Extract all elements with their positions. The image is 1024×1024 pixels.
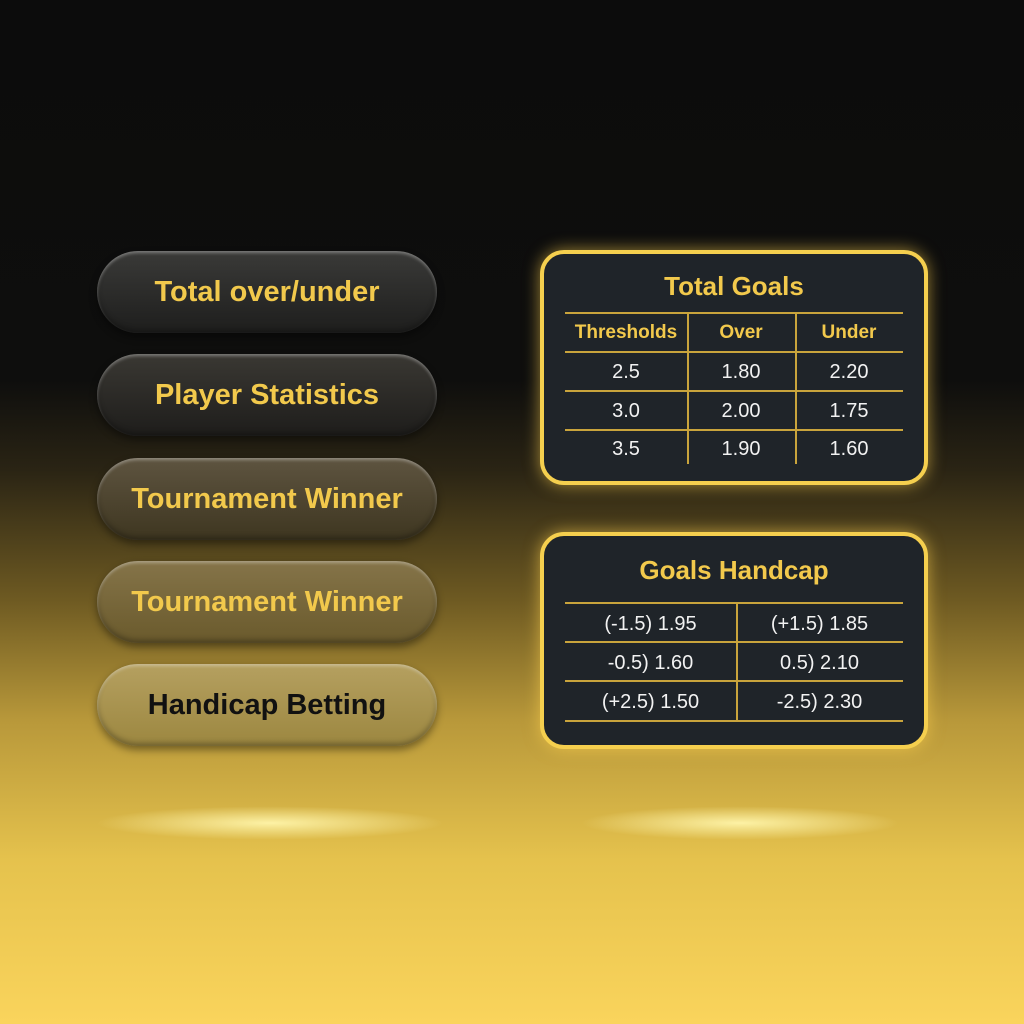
table: thresholds: 1.90 <box>722 438 760 460</box>
table: thresholds: 1.80 <box>722 361 760 383</box>
pill: Tournament Winner: Tournament Winner <box>131 482 403 514</box>
table: thresholds <box>565 312 903 464</box>
table: thresholds: 1.60 <box>830 438 868 460</box>
pill: Player Statistics <box>97 354 437 436</box>
table: handicap: (+1.5) 1.85 <box>771 613 868 635</box>
table: thresholds: Thresholds <box>575 322 677 343</box>
table: handicap: (-1.5) 1.95 <box>604 613 697 635</box>
table: handicap: 0.5) 2.10 <box>780 652 859 674</box>
table: thresholds: Under <box>822 322 876 343</box>
table: thresholds: 2.00 <box>722 400 760 422</box>
panel: Goals Handcap <box>540 532 928 749</box>
table: handicap: -2.5) 2.30 <box>777 691 862 713</box>
title: Goals Handcap: Goals Handcap <box>639 555 829 585</box>
pill: Handicap Betting <box>97 664 437 746</box>
table: thresholds: 1.75 <box>830 400 868 422</box>
table: handicap: (+2.5) 1.50 <box>602 691 699 713</box>
table: thresholds: 3.5 <box>612 438 640 460</box>
pill: Tournament Winner 2 <box>97 561 437 643</box>
table: thresholds: Over <box>719 322 763 343</box>
glow: right <box>580 806 900 840</box>
pill: Handicap Betting: Handicap Betting <box>148 688 386 720</box>
pill: Player Statistics: Player Statistics <box>155 378 379 410</box>
pill: Total over/under: Total over/under <box>154 276 380 308</box>
table: thresholds: 2.5 <box>612 361 640 383</box>
table: handicap <box>565 602 903 722</box>
glow: left <box>95 806 445 840</box>
panel: Total Goals <box>540 250 928 485</box>
pill: Total over/under <box>97 251 437 333</box>
table: handicap: -0.5) 1.60 <box>608 652 693 674</box>
table: thresholds: 2.20 <box>830 361 868 383</box>
table: thresholds: 3.0 <box>612 400 640 422</box>
pill: Tournament Winner <box>97 458 437 540</box>
pill: Tournament Winner 2: Tournament Winner <box>131 586 403 618</box>
title: Total Goals: Total Goals <box>664 271 804 301</box>
